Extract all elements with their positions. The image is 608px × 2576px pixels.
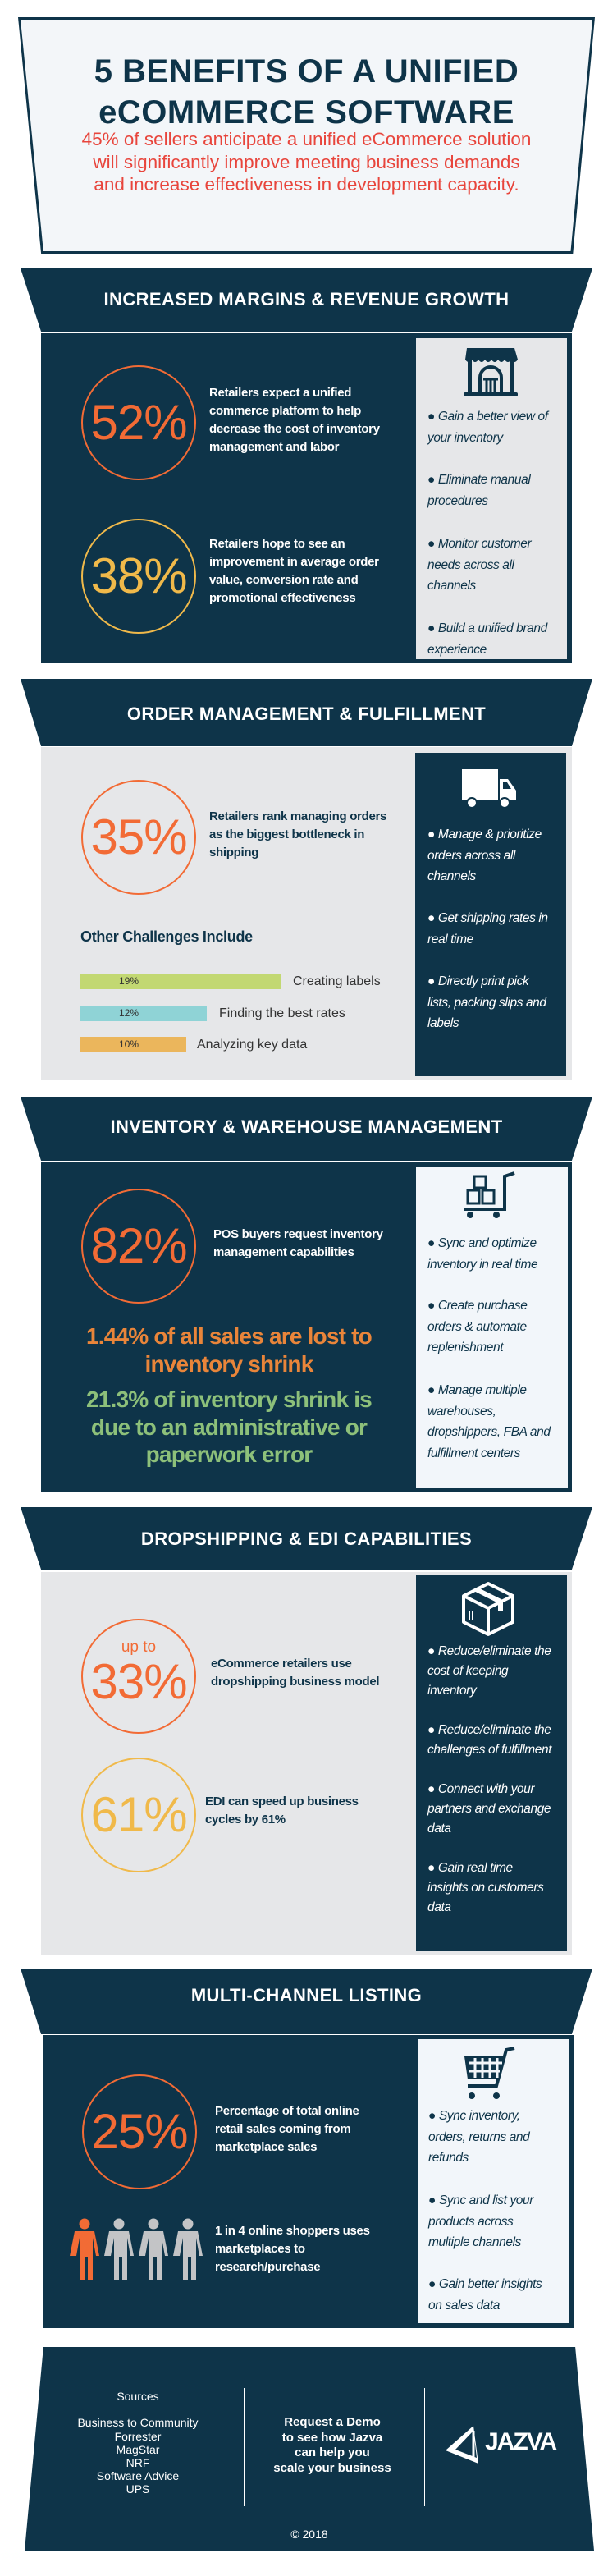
text: 38%: Retailers hope to see an xyxy=(209,537,345,551)
text: ● Gain real time xyxy=(427,1861,513,1875)
text: 1 in 4 xyxy=(215,2224,370,2274)
footer xyxy=(25,2347,594,2551)
text: ● Manage multiple xyxy=(427,1383,527,1397)
text: channels xyxy=(427,579,476,593)
text: ● Eliminate manual xyxy=(427,473,530,487)
stat: shrink error: due to an administrative or xyxy=(91,1414,367,1440)
icon: truck xyxy=(462,769,516,807)
text: ● Reduce/eliminate the xyxy=(427,1723,551,1737)
text: dropshippers, FBA and xyxy=(427,1425,551,1439)
text: ● Manage & prioritize xyxy=(427,827,542,841)
text: labels xyxy=(427,1016,459,1030)
title: eCOMMERCE SOFTWARE xyxy=(98,94,514,131)
bullet list 1 xyxy=(427,410,550,657)
stat: 38% xyxy=(81,519,196,634)
text: inventory xyxy=(427,1684,476,1698)
text: partners and exchange xyxy=(427,1802,551,1816)
text: ● Build a unified brand xyxy=(427,621,547,635)
bar chart xyxy=(80,974,381,1052)
stat: shrink error: 21.3% of inventory shrink is xyxy=(86,1387,372,1412)
section 2 heading xyxy=(21,679,592,746)
subtitle: and increase effectiveness in development capacity. xyxy=(94,174,519,195)
bullet list 4 xyxy=(427,1644,553,1914)
text: replenishment xyxy=(427,1341,503,1354)
text: ● Gain better insights xyxy=(428,2277,542,2291)
section 5 heading: MULTI-CHANNEL LISTING xyxy=(191,1985,422,2005)
text: 33%: dropshipping business model xyxy=(211,1675,379,1689)
text: 1 in 4: 1 in 4 online shoppers uses xyxy=(215,2224,370,2238)
sources: NRF xyxy=(126,2456,149,2469)
text: 52%: decrease the cost of inventory xyxy=(209,422,380,436)
section 4 heading xyxy=(21,1507,592,1570)
text: ● Directly print pick xyxy=(427,974,528,988)
call to action: to see how Jazva xyxy=(282,2430,382,2445)
panel: multi-channel xyxy=(43,2035,574,2328)
bullet list 2 xyxy=(427,827,548,1030)
title xyxy=(95,59,517,123)
subtitle: 45% of sellers anticipate a unified eCommerce solution xyxy=(82,129,531,149)
text: 61% xyxy=(205,1794,359,1827)
bar chart: 19% xyxy=(119,975,139,987)
text: ● Monitor customer xyxy=(427,537,531,551)
logo: JAZVA: JAZVA xyxy=(485,2428,555,2455)
text: Creating labels xyxy=(293,974,381,988)
icon: store xyxy=(464,348,518,396)
stat: shrink error: paperwork error xyxy=(146,1442,312,1467)
side list panel xyxy=(418,2039,569,2323)
icon: hand truck with boxes xyxy=(464,1171,515,1218)
stat: inventory shrink: inventory shrink xyxy=(144,1351,313,1377)
heading: other challenges: Other Challenges Include xyxy=(80,928,253,945)
stat: 35%: 35% xyxy=(90,809,187,864)
text: products across xyxy=(428,2215,513,2228)
call to action xyxy=(274,2418,391,2474)
sources: Software Advice xyxy=(97,2469,179,2482)
subtitle xyxy=(82,132,530,194)
call to action: can help you xyxy=(295,2445,370,2459)
text: inventory in real time xyxy=(427,1258,537,1271)
sources: MagStar xyxy=(117,2443,159,2456)
text: ● Gain a better view of xyxy=(427,410,548,424)
call to action: scale your business xyxy=(273,2461,391,2474)
text: 61%: EDI can speed up business xyxy=(205,1794,359,1808)
bar chart: 10% xyxy=(119,1038,139,1050)
text: refunds xyxy=(428,2151,469,2165)
text: data xyxy=(427,1822,451,1836)
section 1 heading xyxy=(21,268,592,332)
sources: Forrester xyxy=(115,2430,161,2443)
stat: inventory shrink: 1.44% of all sales are lost to xyxy=(86,1323,372,1349)
text: 33% xyxy=(211,1657,379,1689)
text: needs across all xyxy=(427,558,514,571)
panel: dropshipping xyxy=(41,1572,572,1955)
icon: people 1 in 4 xyxy=(70,2218,203,2280)
text: on sales data xyxy=(428,2299,500,2312)
text: 82%: POS buyers request inventory xyxy=(213,1227,383,1241)
side list panel xyxy=(415,753,566,1076)
text: procedures xyxy=(427,494,488,507)
text: warehouses, xyxy=(427,1404,496,1419)
section 4 heading: DROPSHIPPING & EDI CAPABILITIES xyxy=(141,1529,472,1549)
text: 35%: shipping xyxy=(209,846,258,859)
text: 52%: commerce platform to help xyxy=(209,404,361,418)
stat: 52%: 52% xyxy=(90,395,187,450)
panel: inventory xyxy=(41,1162,572,1492)
text: 82% xyxy=(213,1227,383,1259)
section 1 heading: INCREASED MARGINS & REVENUE GROWTH xyxy=(104,289,509,309)
text: 33%: eCommerce retailers use xyxy=(211,1657,352,1671)
side list panel xyxy=(416,1167,568,1488)
stat: 82%: 82% xyxy=(90,1218,187,1273)
text: 25% xyxy=(215,2104,359,2154)
panel: order management xyxy=(41,747,572,1080)
stat: 82% xyxy=(81,1189,196,1304)
text: 1 in 4: research/purchase xyxy=(215,2260,320,2274)
text: 61%: cycles by 61% xyxy=(205,1813,286,1827)
text: 52% xyxy=(209,386,380,454)
stat: 61% xyxy=(81,1758,196,1872)
text: orders across all xyxy=(427,849,515,862)
text: experience xyxy=(427,642,487,657)
stat: 61%: 61% xyxy=(90,1787,187,1842)
bullet list 5 xyxy=(428,2109,542,2312)
text: fulfillment centers xyxy=(427,1446,520,1460)
text: 1 in 4: marketplaces to xyxy=(215,2242,305,2256)
text: multiple channels xyxy=(428,2235,521,2249)
text: channels xyxy=(427,869,476,883)
text: 38%: value, conversion rate and xyxy=(209,573,358,587)
subtitle: will significantly improve meeting business demands xyxy=(93,151,520,172)
copyright: © 2018 xyxy=(290,2528,328,2541)
text: 82%: management capabilities xyxy=(213,1245,354,1259)
icon: box xyxy=(462,1582,514,1636)
text: real time xyxy=(427,933,473,946)
section 5 heading xyxy=(21,1969,592,2034)
text: orders, returns and xyxy=(428,2129,529,2144)
stat: inventory shrink xyxy=(86,1323,372,1377)
stat: 35% xyxy=(81,780,196,895)
text: ● Sync and optimize xyxy=(427,1236,537,1250)
text: 38% xyxy=(209,537,379,605)
sources: Business to Community xyxy=(77,2416,199,2429)
text: orders & automate xyxy=(427,1320,527,1333)
text: ● Get shipping rates in xyxy=(427,911,548,925)
call to action: Request a Demo xyxy=(284,2415,381,2429)
text: 52%: management and labor xyxy=(209,440,339,454)
bullet list 3 xyxy=(427,1236,551,1460)
text: lists, packing slips and xyxy=(427,995,546,1010)
text: 35%: Retailers rank managing orders xyxy=(209,809,386,823)
stat: up to 33% xyxy=(81,1619,196,1734)
stat: up to 33%: up to xyxy=(121,1639,156,1656)
stat: shrink error xyxy=(86,1387,372,1467)
side list panel xyxy=(416,338,567,659)
stat: 52% xyxy=(81,365,196,480)
bar chart: Analyzing key data xyxy=(197,1038,307,1052)
text: ● Connect with your xyxy=(427,1782,534,1796)
section 3 heading: INVENTORY & WAREHOUSE MANAGEMENT xyxy=(110,1116,503,1137)
sources: Sources xyxy=(117,2390,159,2403)
text: 38%: promotional effectiveness xyxy=(209,591,355,605)
text: 52%: Retailers expect a unified xyxy=(209,386,351,400)
text: 25%: retail sales coming from xyxy=(215,2122,350,2136)
title: 5 BENEFITS OF A UNIFIED xyxy=(94,53,519,89)
sources xyxy=(79,2392,199,2493)
section 2 heading: ORDER MANAGEMENT & FULFILLMENT xyxy=(127,704,486,724)
bar chart: 12% xyxy=(119,1007,139,1019)
stat: 25% xyxy=(82,2074,197,2189)
text: 35% xyxy=(209,809,386,859)
text: insights on customers xyxy=(427,1881,543,1895)
text: data xyxy=(427,1900,451,1914)
text: challenges of fulfillment xyxy=(427,1743,551,1757)
text: your inventory xyxy=(427,430,503,445)
bar chart: Finding the best rates xyxy=(219,1006,345,1020)
panel: increased margins xyxy=(41,333,572,663)
text: ● Sync and list your xyxy=(428,2193,533,2207)
text: ● Sync inventory, xyxy=(428,2109,520,2123)
text: ● Reduce/eliminate the xyxy=(427,1644,551,1658)
text: 25%: marketplace sales xyxy=(215,2140,317,2154)
text: 35%: as the biggest bottleneck in xyxy=(209,827,364,841)
side list panel xyxy=(416,1575,567,1951)
text: cost of keeping xyxy=(427,1664,508,1678)
logo: JAZVA xyxy=(446,2426,556,2464)
sources: UPS xyxy=(126,2482,149,2496)
section 3 heading xyxy=(21,1097,592,1161)
stat: 38%: 38% xyxy=(90,548,187,603)
text: 25%: Percentage of total online xyxy=(215,2104,359,2118)
icon: shopping cart xyxy=(464,2047,515,2099)
header panel xyxy=(18,17,595,254)
stat: up to 33%: 33% xyxy=(90,1654,187,1709)
stat: 25%: 25% xyxy=(91,2104,188,2159)
text: 38%: improvement in average order xyxy=(209,555,379,569)
text: ● Create purchase xyxy=(427,1299,527,1313)
